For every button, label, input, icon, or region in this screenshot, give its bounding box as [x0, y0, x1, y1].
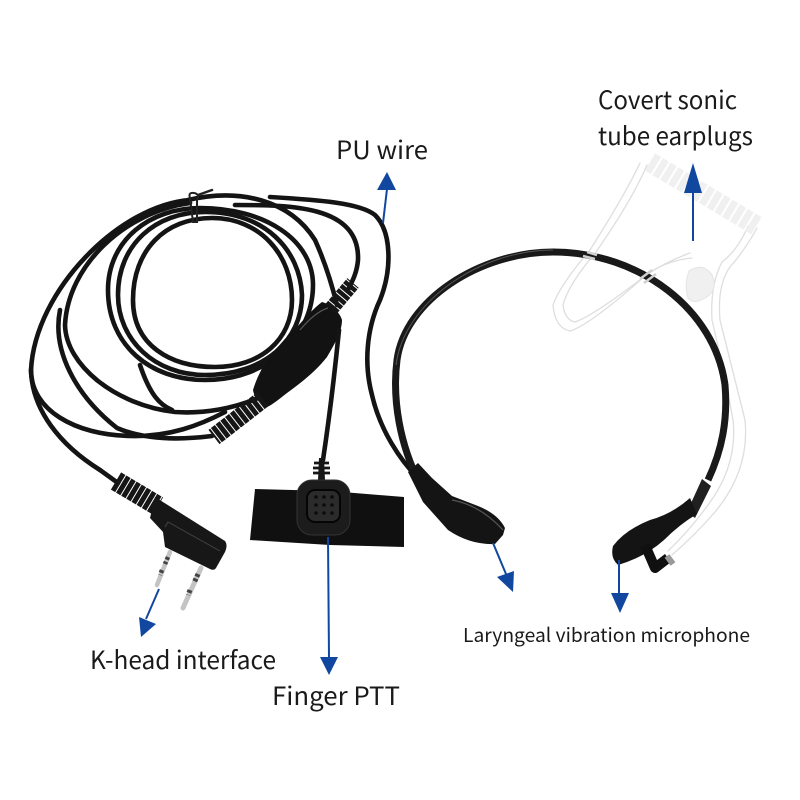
label: covert sonic tube earplugs: Covert sonic: [598, 81, 737, 117]
ear tip: [686, 267, 714, 302]
left throat microphone pad: [408, 463, 505, 544]
finger PTT strap: [250, 489, 404, 547]
finger PTT button: [297, 458, 350, 535]
arrow: PU wire: [377, 172, 396, 223]
arrow: left microphone: [493, 543, 514, 592]
wire to finger PTT: [323, 330, 339, 460]
cable tie: [190, 193, 198, 222]
upper strain relief: [331, 283, 353, 309]
label: covert sonic tube earplugs: tube earplugs: [598, 117, 753, 153]
neckband: [396, 250, 726, 484]
lower strain relief: [214, 399, 263, 437]
arrow: right microphone: [611, 560, 629, 613]
tube overlay on neckband: [583, 252, 656, 283]
K-head connector: [100, 470, 226, 608]
arrow: K-head: [139, 589, 159, 637]
microphone elbow: [645, 545, 668, 568]
arrow: finger PTT: [320, 537, 338, 675]
PU wire running to microphone: [270, 197, 418, 478]
transparent acoustic tube: [553, 162, 757, 555]
inline control box: [253, 283, 353, 407]
coiled black cable: [31, 190, 358, 470]
label: PU wire: PU wire: [336, 131, 428, 167]
arrow: earplugs: [684, 163, 702, 241]
label: K-head interface: K-head interface: [90, 641, 276, 677]
right throat microphone pad: [612, 479, 711, 568]
label: laryngeal vibration microphone: Laryngeal vibration microphone: [463, 621, 750, 648]
label: covert sonic tube earplugs: [598, 81, 753, 153]
pins: [157, 552, 201, 608]
coiled tube section: [650, 162, 757, 226]
label: Finger PTT: Finger PTT: [272, 677, 400, 713]
